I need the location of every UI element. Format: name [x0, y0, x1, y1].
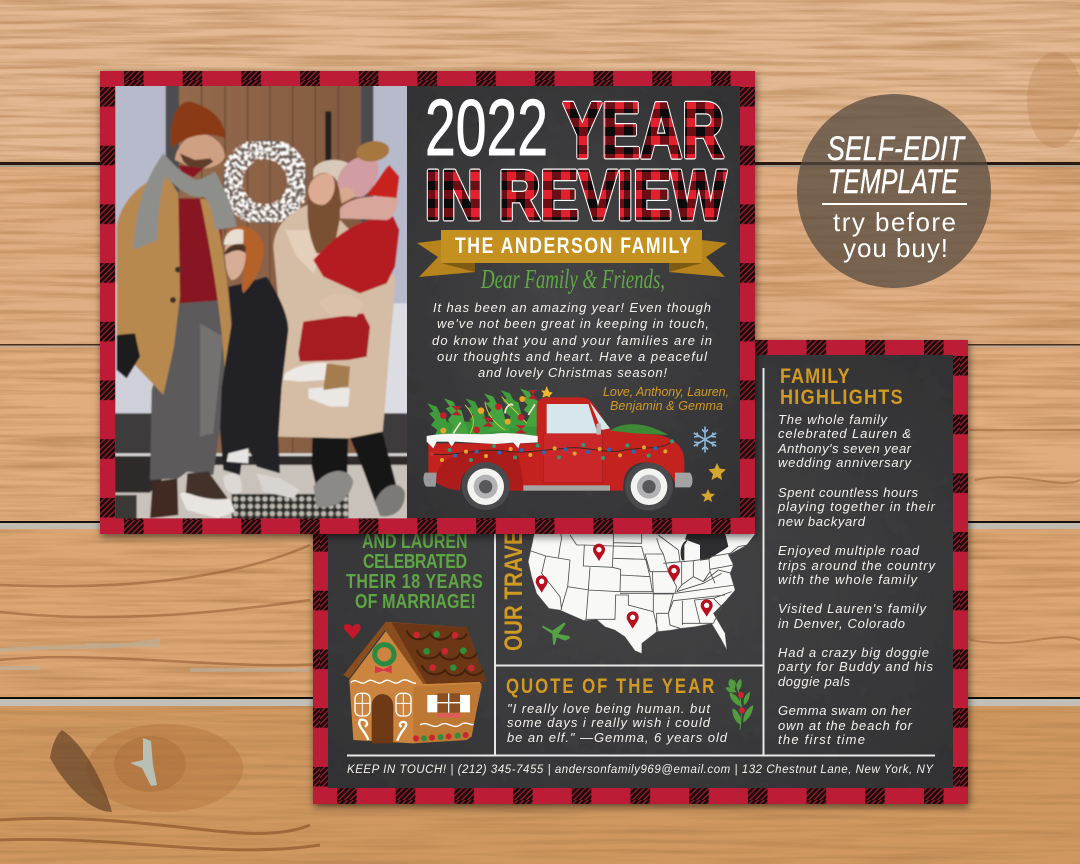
family highlights list: party for Buddy and his: [777, 659, 934, 674]
family highlights list: own at the beach for: [778, 718, 913, 733]
icon: gold star large: [708, 463, 726, 480]
quote text: [507, 701, 728, 745]
badge: self-edit template: you buy!: [843, 233, 948, 263]
title: IN REVIEW: IN REVIEW: [425, 156, 726, 234]
icon: green plane: [542, 622, 570, 645]
truck body: [428, 397, 684, 491]
anniversary heading: OF MARRIAGE!: [355, 590, 476, 612]
quote heading: QUOTE OF THE YEAR: [506, 675, 714, 699]
icon: heart: [344, 624, 361, 639]
divider lines on back card: [347, 368, 935, 756]
tree: [427, 388, 546, 442]
signature: [603, 385, 729, 413]
signature: Love, Anthony, Lauren,: [603, 385, 729, 399]
star: [541, 386, 553, 397]
family highlights list: trips around the country: [778, 558, 936, 573]
title: IN REVIEW: IN REVIEW: [425, 156, 726, 234]
map pins: [536, 544, 713, 629]
family highlights heading: HIGHLIGHTS: [780, 386, 903, 409]
family highlights list: with the whole family: [778, 572, 918, 587]
icon: gold star small: [701, 489, 715, 502]
gingerbread house: [343, 622, 487, 743]
signature: Benjamin & Gemma: [610, 399, 723, 413]
family highlights list: wedding anniversary: [778, 455, 912, 470]
family highlights list: doggie pals: [778, 674, 850, 689]
greeting: Dear Family & Friends,: [480, 264, 665, 294]
title: [425, 83, 726, 234]
family highlights list: Visited Lauren's family: [778, 601, 928, 616]
quote text: "I really love being human. but: [507, 701, 711, 716]
family highlights list: Spent countless hours: [778, 485, 918, 500]
wreath: [232, 148, 298, 215]
snow: [427, 433, 538, 448]
family highlights list: new backyard: [778, 514, 866, 529]
family highlights heading: FAMILY: [780, 365, 850, 388]
letter body: do know that you and your families are in: [432, 333, 712, 348]
badge: self-edit template: [797, 94, 991, 288]
family highlights list: The whole family: [778, 412, 888, 427]
ribbon banner: [417, 230, 727, 277]
family highlights list: playing together in their: [777, 499, 936, 514]
family highlights list: the first time: [778, 732, 865, 747]
family name: THE ANDERSON FAMILY: [455, 234, 691, 259]
badge: self-edit template: try before: [833, 207, 956, 237]
anniversary heading: AND LAUREN: [362, 530, 468, 552]
family highlights heading: [780, 365, 903, 409]
title: YEAR: YEAR: [563, 86, 724, 174]
string lights: [430, 442, 672, 455]
badge heading: SELF-EDIT: [827, 130, 966, 168]
red truck with tree: [423, 386, 692, 511]
icon: holly sprig: [726, 679, 753, 730]
family highlights list: Enjoyed multiple road: [778, 543, 920, 558]
family highlights list: Had a crazy big doggie: [778, 645, 929, 660]
letter body: [432, 300, 712, 380]
year: 2022: 2022: [425, 83, 548, 172]
wheels: [462, 462, 673, 511]
footer contact line: KEEP IN TOUCH! | (212) 345-7455 | andersonfamily969@email.com | 132 Chestnut Lane, New York, NY: [347, 764, 934, 776]
letter body: our thoughts and heart. Have a peaceful: [437, 349, 708, 364]
boy: [220, 277, 288, 475]
family highlights list: celebrated Lauren &: [778, 426, 911, 441]
US map: [528, 530, 755, 653]
quote text: be an elf." —Gemma, 6 years old: [507, 730, 728, 745]
icon: snowflake: [694, 426, 716, 452]
badge: self-edit template: TEMPLATE: [828, 163, 958, 201]
letter body: It has been an amazing year! Even though: [433, 300, 711, 315]
photo: family at front door: [113, 83, 410, 520]
title: YEAR: YEAR: [563, 86, 724, 174]
bumpers and trim: [423, 473, 437, 487]
family highlights list: in Denver, Colorado: [778, 616, 905, 631]
back card: [313, 340, 968, 804]
quote text: some days i really wish i could: [507, 715, 711, 730]
front card: [100, 71, 755, 534]
anniversary heading: THEIR 18 YEARS: [346, 570, 483, 592]
family highlights list: [777, 412, 936, 747]
anniversary heading: CELEBRATED: [363, 550, 467, 572]
girl: [313, 217, 399, 293]
letter body: and lovely Christmas season!: [478, 365, 667, 380]
family highlights list: Gemma swam on her: [778, 703, 912, 718]
map title: OUR TRAVELS: [500, 505, 528, 651]
family highlights list: Anthony's seven year: [777, 441, 912, 456]
letter body: we've not been great in keeping in touch,: [437, 316, 709, 331]
anniversary heading: [346, 530, 483, 612]
man: [150, 300, 228, 480]
woman: [310, 432, 397, 506]
